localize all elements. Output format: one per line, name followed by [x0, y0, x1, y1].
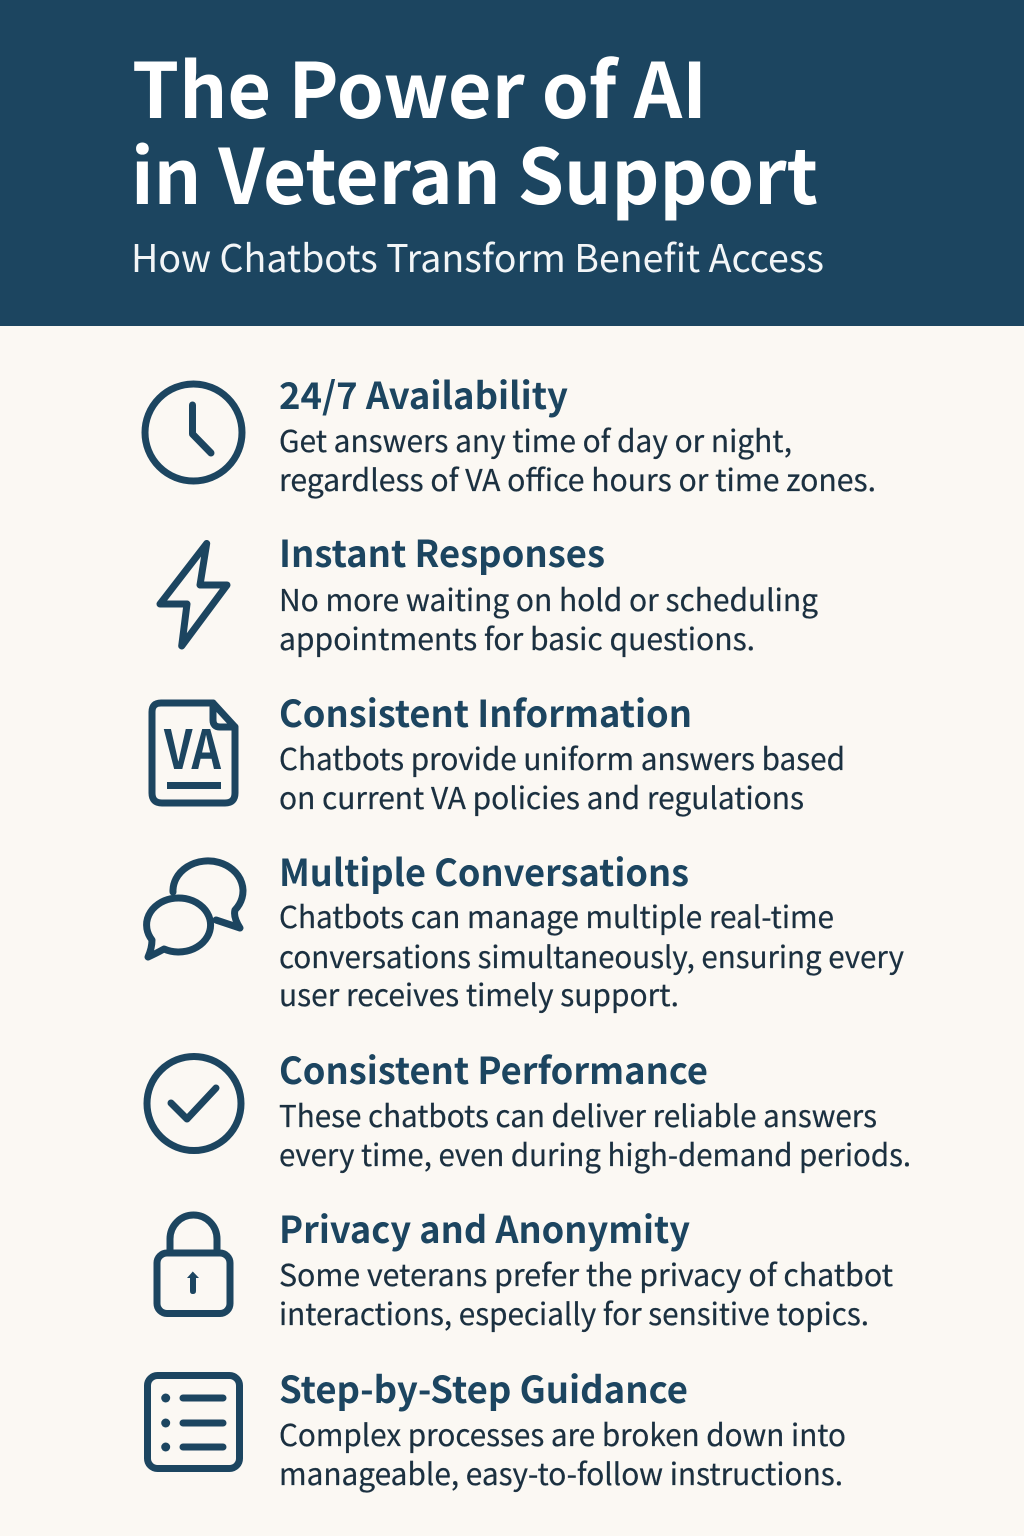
- icon: clock: [145, 384, 242, 481]
- icon: VA document: VA: [163, 706, 221, 785]
- heading: privacy and anonymity: Privacy and Anonymity: [279, 1200, 690, 1254]
- text: guidance description: Complex processes are broken down into: [279, 1411, 846, 1455]
- header banner: [0, 0, 1024, 326]
- text: guidance description: manageable, easy-to-follow instructions.: [279, 1450, 843, 1494]
- text: consistent information description: [279, 735, 845, 818]
- text: consistent information description: on current VA policies and regulations: [279, 774, 804, 818]
- icon: VA document: [152, 703, 235, 803]
- title: in Veteran Support: [131, 116, 818, 226]
- text: instant responses description: No more waiting on hold or scheduling: [279, 576, 818, 620]
- heading: multiple conversations: Multiple Conversations: [279, 843, 689, 897]
- text: multiple conversations description: Chatbots can manage multiple real-time: [279, 893, 834, 937]
- text: privacy description: interactions, especially for sensitive topics.: [279, 1290, 869, 1334]
- panel: consistent information: [152, 684, 845, 818]
- icon: checklist: [148, 1376, 240, 1468]
- text: privacy description: Some veterans prefer the privacy of chatbot: [279, 1251, 893, 1295]
- panel: privacy and anonymity: [157, 1200, 893, 1334]
- text: guidance description: [279, 1411, 846, 1494]
- panel: instant responses: [160, 524, 818, 659]
- icon: chat bubbles: [147, 861, 243, 957]
- panel: 24/7 availability: [145, 366, 876, 500]
- icon: check circle: [147, 1056, 241, 1150]
- icon: lightning bolt: [160, 544, 227, 646]
- text: availability description: regardless of VA office hours or time zones.: [279, 456, 876, 500]
- text: multiple conversations description: [279, 893, 904, 1015]
- icon: padlock: [157, 1215, 230, 1314]
- text: availability description: Get answers any time of day or night,: [279, 417, 792, 461]
- panel: step-by-step guidance: [148, 1360, 846, 1494]
- heading: instant responses: Instant Responses: [279, 524, 605, 578]
- title: The Power of AI: [132, 30, 707, 140]
- panel: consistent performance: [147, 1041, 911, 1175]
- subtitle: How Chatbots Transform Benefit Access: [131, 228, 824, 283]
- heading: 24/7 availability: 24/7 Availability: [279, 366, 568, 420]
- heading: consistent performance: Consistent Performance: [279, 1041, 708, 1095]
- panel: multiple conversations: [147, 843, 904, 1015]
- text: multiple conversations description: conversations simultaneously, ensuring every: [279, 933, 904, 977]
- text: instant responses description: [279, 576, 818, 659]
- text: consistent performance description: every time, even during high-demand periods.: [279, 1131, 911, 1175]
- text: availability description: [279, 417, 876, 500]
- text: instant responses description: appointments for basic questions.: [279, 615, 755, 659]
- heading: consistent information: Consistent Information: [279, 684, 692, 738]
- text: consistent information description: Chatbots provide uniform answers based: [279, 735, 845, 779]
- text: multiple conversations description: user receives timely support.: [279, 971, 679, 1015]
- text: consistent performance description: These chatbots can deliver reliable answers: [279, 1092, 877, 1136]
- text: consistent performance description: [279, 1092, 911, 1175]
- text: privacy description: [279, 1251, 893, 1334]
- title: [131, 30, 818, 226]
- heading: step-by-step guidance: Step-by-Step Guidance: [279, 1360, 688, 1414]
